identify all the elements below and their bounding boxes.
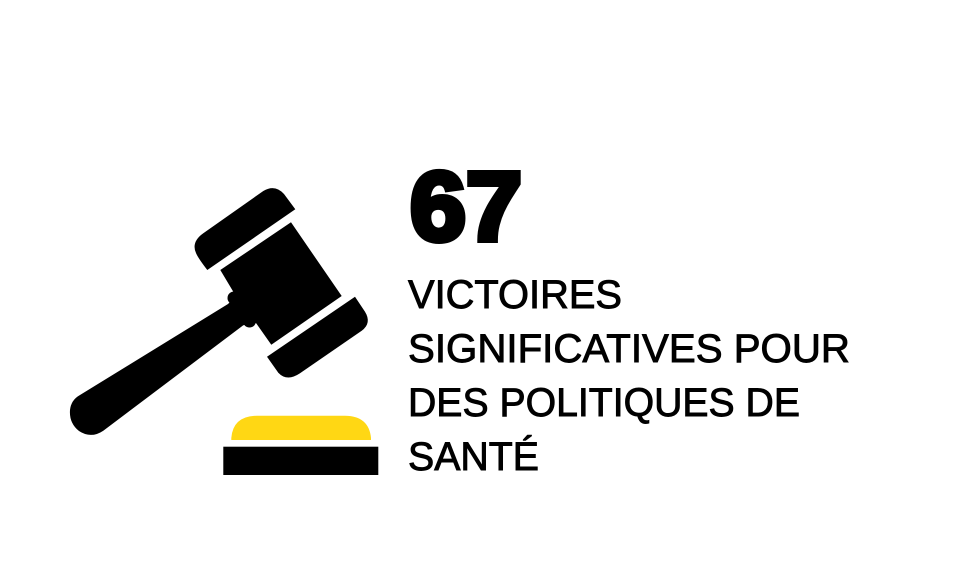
line 3: DES POLITIQUES DE — [408, 381, 800, 425]
line 1: VICTOIRES — [408, 273, 622, 317]
big number 67: 67 — [410, 152, 522, 261]
sound block yellow top — [231, 416, 371, 440]
icon: judge gavel and sound block — [70, 188, 378, 475]
gavel top cap — [195, 188, 295, 270]
description text — [408, 273, 850, 479]
gavel bottom cap — [267, 297, 368, 378]
line 4: SANTÉ — [408, 434, 539, 479]
line 2: SIGNIFICATIVES POUR — [408, 327, 850, 371]
gavel handle — [70, 292, 262, 435]
gavel head body — [220, 222, 342, 345]
sound block black base — [223, 447, 378, 475]
